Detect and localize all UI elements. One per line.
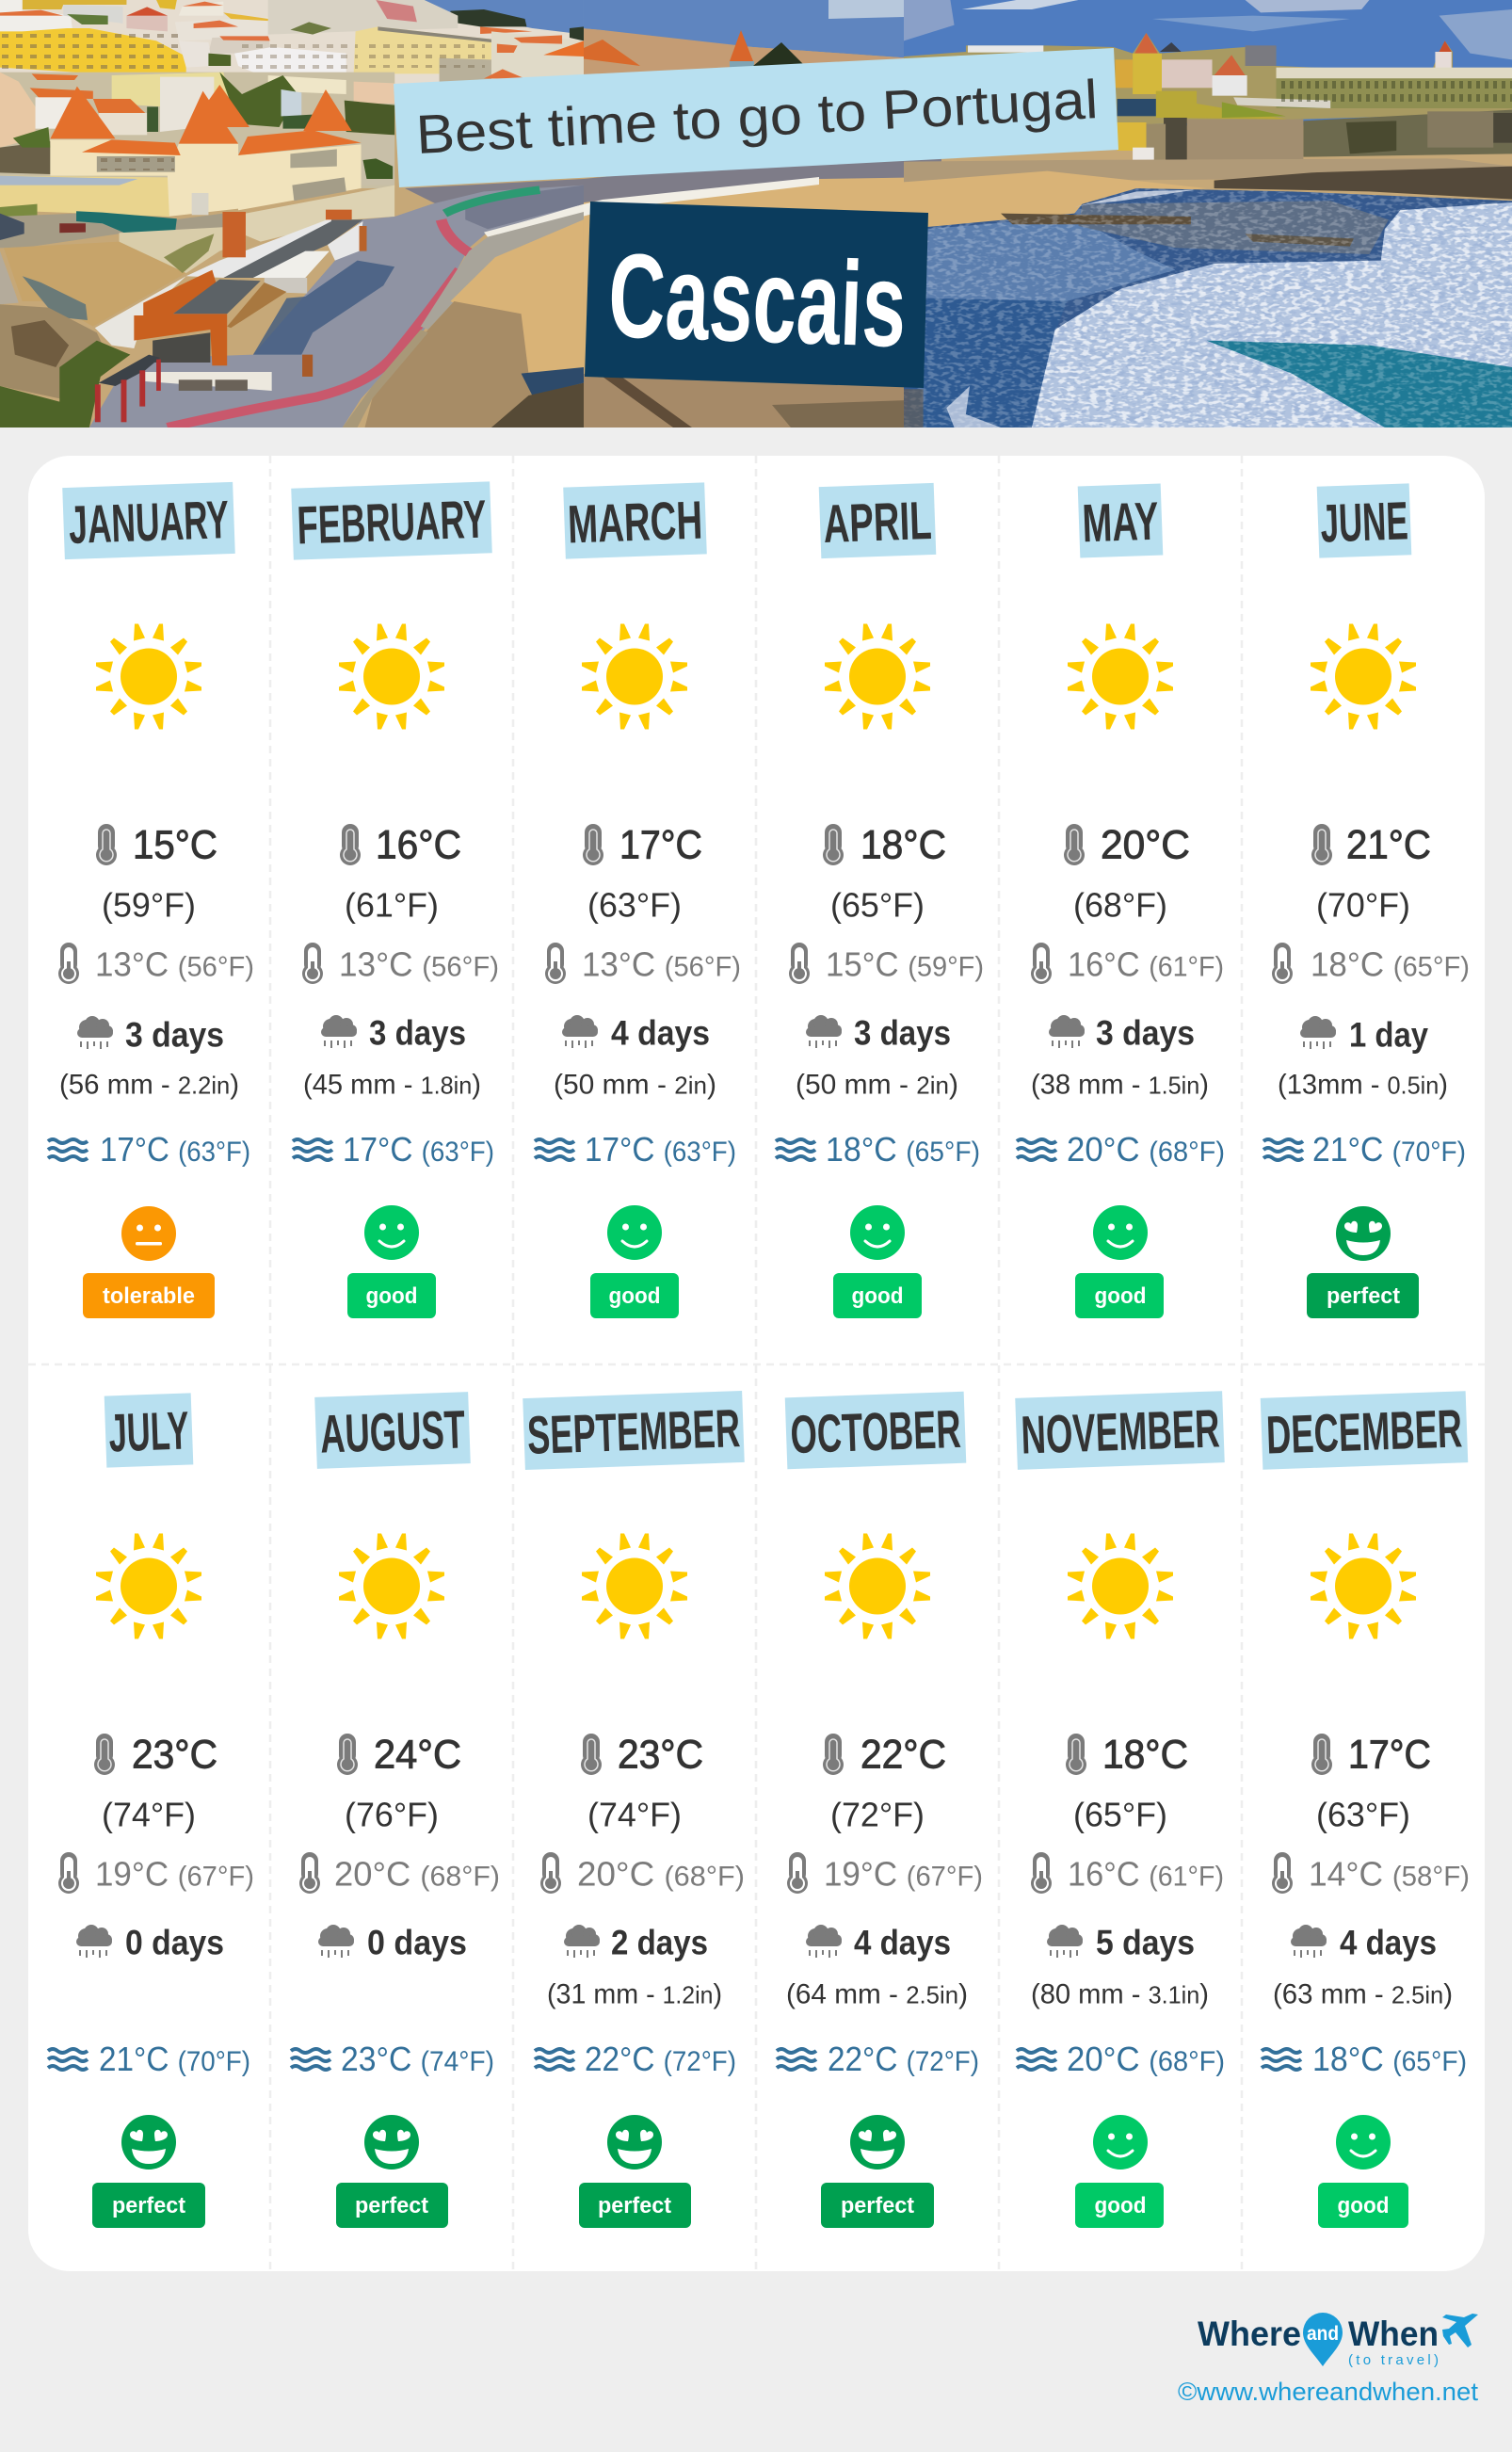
rating badge: good: good: [365, 1283, 418, 1309]
month column: August: [291, 1392, 500, 2228]
low temperature: 18°C (65°F): [1311, 945, 1470, 983]
icon: thermometer low: [1031, 943, 1052, 984]
rating badge: tolerable: tolerable: [103, 1283, 195, 1309]
icon: heart-eyes face: [850, 2115, 905, 2170]
icon: thermometer low: [1272, 1852, 1293, 1894]
high temperature: 18°C: [1102, 1733, 1188, 1778]
high temperature: 17°C: [619, 823, 702, 868]
icon: thermometer low: [789, 943, 810, 984]
icon: happy face: [364, 1205, 419, 1260]
rainy days: 4 days: [1340, 1923, 1437, 1962]
month column: July: [48, 1393, 254, 2228]
rating badge: good: good: [608, 1283, 661, 1309]
heading: April: [819, 483, 936, 558]
heading: October: [785, 1392, 966, 1469]
icon: thermometer high: [583, 824, 603, 865]
high temperature: 23°C: [132, 1733, 217, 1778]
icon: sun: [825, 623, 930, 729]
icon: rain cloud: [1300, 1016, 1336, 1049]
icon: heart-eyes face: [607, 2115, 662, 2170]
icon: thermometer high: [340, 824, 361, 865]
heading: May: MAY: [1081, 492, 1160, 554]
icon: thermometer low: [787, 1852, 808, 1894]
sea temperature: 22°C (72°F): [585, 2040, 736, 2078]
low temperature: 13°C (56°F): [582, 945, 741, 983]
heading: November: [1015, 1391, 1225, 1470]
icon: sun: [582, 623, 687, 729]
icon: thermometer high: [337, 1734, 358, 1775]
sea temperature: 17°C (63°F): [343, 1130, 494, 1169]
icon: rain cloud: [321, 1015, 357, 1048]
icon: thermometer high: [823, 1734, 844, 1775]
heading: February: FEBRUARY: [297, 490, 488, 556]
icon: sun: [1068, 1533, 1173, 1638]
sea temperature: 17°C (63°F): [585, 1130, 736, 1169]
hero photo: Cascais coastline: [0, 0, 1512, 427]
month column: April: [776, 483, 984, 1318]
icon: thermometer low: [302, 943, 323, 984]
rating badge: good: good: [1094, 2193, 1147, 2218]
icon: sun: [96, 1533, 201, 1638]
title banner: [394, 48, 1118, 187]
rainy days: 1 day: [1349, 1015, 1428, 1055]
high temperature fahrenheit: (61°F): [345, 885, 439, 925]
icon: waves: [48, 1139, 88, 1160]
sea temperature: 21°C (70°F): [99, 2040, 250, 2078]
heading: October: OCTOBER: [790, 1399, 962, 1465]
low temperature: 13°C (56°F): [339, 945, 499, 983]
icon: heart-eyes face: [364, 2115, 419, 2170]
icon: waves: [48, 2049, 88, 2070]
heading: January: [62, 482, 235, 559]
icon: sun: [339, 1533, 444, 1638]
heading: July: JULY: [107, 1401, 190, 1463]
heading: August: [314, 1392, 471, 1469]
icon: waves: [293, 1139, 332, 1160]
low temperature: 13°C (56°F): [95, 945, 254, 983]
icon: sun: [1311, 623, 1416, 729]
month column: May: [1017, 483, 1225, 1318]
rating badge: perfect: [336, 2183, 448, 2228]
rating badge: perfect: [92, 2183, 205, 2228]
icon: rain cloud: [76, 1925, 112, 1958]
icon: happy face: [607, 1205, 662, 1260]
high temperature: 16°C: [376, 823, 461, 868]
icon: sun: [1068, 623, 1173, 729]
website credit: ©www.whereandwhen.net: [1178, 2378, 1479, 2406]
icon: thermometer low: [540, 1852, 561, 1894]
panel: monthly climate table: [28, 456, 1485, 2271]
high temperature fahrenheit: (70°F): [1316, 885, 1410, 925]
low temperature: 20°C (68°F): [577, 1855, 745, 1893]
icon: thermometer high: [1311, 824, 1332, 865]
icon: happy face: [1336, 2115, 1391, 2170]
rating badge: good: good: [1094, 1283, 1147, 1309]
rainy days: 3 days: [369, 1013, 466, 1053]
sea temperature: 20°C (68°F): [1067, 1130, 1225, 1169]
high temperature fahrenheit: (74°F): [587, 1795, 682, 1834]
rating badge: perfect: perfect: [355, 2193, 428, 2218]
rainy days: 0 days: [125, 1923, 224, 1962]
rainy days: 3 days: [1096, 1013, 1195, 1053]
rating badge: good: [1075, 1273, 1164, 1318]
icon: waves: [776, 1139, 815, 1160]
icon: thermometer low: [1031, 1852, 1052, 1894]
icon: waves: [535, 2049, 574, 2070]
month column: October: [777, 1392, 983, 2228]
icon: waves: [1263, 1139, 1303, 1160]
rainfall amount: (45 mm - 1.8in): [303, 1070, 481, 1100]
rainfall amount: (56 mm - 2.2in): [59, 1070, 239, 1100]
rainy days: 5 days: [1096, 1923, 1195, 1962]
logo: Where and When: Where: [1198, 2315, 1301, 2353]
icon: rain cloud: [1291, 1925, 1327, 1958]
high temperature fahrenheit: (68°F): [1073, 885, 1167, 925]
icon: thermometer high: [1066, 1734, 1086, 1775]
rating badge: good: [590, 1273, 679, 1318]
rating badge: perfect: perfect: [112, 2193, 185, 2218]
month column: December: [1261, 1391, 1470, 2228]
icon: thermometer high: [94, 1734, 115, 1775]
month column: March: [535, 482, 741, 1318]
low temperature: 19°C (67°F): [95, 1855, 254, 1893]
city name: Cascais: Cascais: [606, 228, 909, 372]
sea temperature: 18°C (65°F): [1312, 2040, 1467, 2078]
rating badge: perfect: perfect: [841, 2193, 914, 2218]
rating badge: perfect: [821, 2183, 934, 2228]
rainfall amount: (13mm - 0.5in): [1278, 1070, 1448, 1100]
icon: rain cloud: [77, 1016, 113, 1049]
icon: map pin: and: [1307, 2323, 1339, 2345]
heading: June: JUNE: [1319, 491, 1409, 555]
high temperature fahrenheit: (76°F): [345, 1795, 439, 1834]
icon: map pin: [1303, 2313, 1343, 2366]
rating badge: good: [1075, 2183, 1164, 2228]
heading: March: [563, 482, 707, 559]
sea temperature: 18°C (65°F): [826, 1130, 980, 1169]
icon: sun: [582, 1533, 687, 1638]
icon: thermometer low: [58, 943, 79, 984]
low temperature: 14°C (58°F): [1309, 1855, 1470, 1893]
rainfall amount: (80 mm - 3.1in): [1031, 1979, 1209, 2009]
heading: September: SEPTEMBER: [526, 1398, 741, 1466]
heading: November: NOVEMBER: [1021, 1398, 1221, 1466]
heading: August: AUGUST: [319, 1399, 466, 1465]
month column: June: [1263, 483, 1470, 1318]
rainfall amount: (31 mm - 1.2in): [547, 1979, 722, 2009]
sea temperature: 17°C (63°F): [100, 1130, 250, 1169]
icon: sun: [1311, 1533, 1416, 1638]
low temperature: 20°C (68°F): [334, 1855, 500, 1893]
sea temperature: 20°C (68°F): [1067, 2040, 1225, 2078]
icon: sun: [96, 623, 201, 729]
icon: neutral face: [121, 1206, 176, 1261]
icon: airplane: [1442, 2314, 1478, 2347]
high temperature: 23°C: [618, 1733, 703, 1778]
icon: thermometer high: [1311, 1734, 1332, 1775]
title text: Best time to go to Portugal: [414, 69, 1100, 166]
low temperature: 15°C (59°F): [826, 945, 984, 983]
high temperature: 18°C: [861, 823, 946, 868]
rainy days: 4 days: [854, 1923, 951, 1962]
month column: November: [1015, 1391, 1225, 2228]
icon: happy face: [1093, 1205, 1148, 1260]
icon: waves: [535, 1139, 574, 1160]
high temperature: 24°C: [374, 1733, 461, 1778]
high temperature fahrenheit: (72°F): [830, 1795, 925, 1834]
high temperature fahrenheit: (65°F): [830, 885, 925, 925]
rating badge: perfect: perfect: [1327, 1283, 1400, 1309]
icon: rain cloud: [318, 1925, 354, 1958]
low temperature: 16°C (61°F): [1068, 945, 1224, 983]
icon: happy face: [1093, 2115, 1148, 2170]
icon: thermometer low: [1272, 943, 1293, 984]
icon: rain cloud: [806, 1015, 842, 1048]
logo: Where and When: (to travel): [1348, 2352, 1439, 2368]
icon: waves: [1017, 2049, 1056, 2070]
heading: September: [523, 1391, 745, 1470]
high temperature: 20°C: [1101, 823, 1190, 868]
heading: June: [1317, 483, 1411, 558]
high temperature: 15°C: [133, 823, 217, 868]
icon: rain cloud: [1047, 1925, 1083, 1958]
sea temperature: 21°C (70°F): [1312, 1130, 1466, 1169]
heading: March: MARCH: [567, 491, 703, 555]
icon: waves: [1017, 1139, 1056, 1160]
icon: rain cloud: [1049, 1015, 1085, 1048]
icon: heart-eyes face: [1336, 1206, 1391, 1261]
icon: thermometer high: [1064, 824, 1085, 865]
rainfall amount: (64 mm - 2.5in): [786, 1979, 968, 2009]
rating badge: perfect: [1307, 1273, 1419, 1318]
sea temperature: 22°C (72°F): [828, 2040, 979, 2078]
rainfall amount: (38 mm - 1.5in): [1031, 1070, 1209, 1100]
icon: rain cloud: [564, 1925, 600, 1958]
high temperature: 21°C: [1346, 823, 1431, 868]
icon: thermometer low: [58, 1852, 79, 1894]
sea temperature: 23°C (74°F): [341, 2040, 494, 2078]
month column: January: [48, 482, 254, 1318]
icon: sun: [825, 1533, 930, 1638]
rating badge: good: good: [1337, 2193, 1390, 2218]
icon: waves: [1262, 2049, 1301, 2070]
icon: happy face: [850, 1205, 905, 1260]
icon: thermometer high: [823, 824, 844, 865]
rating badge: tolerable: [83, 1273, 215, 1318]
icon: waves: [777, 2049, 816, 2070]
month column: February: [291, 481, 499, 1318]
high temperature: 22°C: [861, 1733, 946, 1778]
heading: May: [1078, 483, 1163, 558]
rating badge: good: good: [851, 1283, 904, 1309]
rainfall amount: (50 mm - 2in): [796, 1070, 958, 1100]
high temperature fahrenheit: (74°F): [102, 1795, 196, 1834]
icon: thermometer high: [96, 824, 117, 865]
rainy days: 2 days: [611, 1923, 708, 1962]
high temperature fahrenheit: (63°F): [1316, 1795, 1410, 1834]
icon: heart-eyes face: [121, 2115, 176, 2170]
icon: waves: [291, 2049, 330, 2070]
icon: thermometer low: [545, 943, 566, 984]
high temperature fahrenheit: (65°F): [1073, 1795, 1167, 1834]
low temperature: 19°C (67°F): [824, 1855, 983, 1893]
icon: sun: [339, 623, 444, 729]
rainy days: 4 days: [611, 1013, 710, 1053]
icon: rain cloud: [806, 1925, 842, 1958]
high temperature: 17°C: [1348, 1733, 1431, 1778]
rainy days: 3 days: [125, 1015, 224, 1055]
rating badge: good: [1318, 2183, 1408, 2228]
rating badge: good: [833, 1273, 922, 1318]
icon: rain cloud: [562, 1015, 598, 1048]
icon: thermometer high: [581, 1734, 602, 1775]
rating badge: good: [347, 1273, 436, 1318]
logo: Where and When: [1198, 2313, 1478, 2368]
heading: April: APRIL: [822, 491, 933, 555]
logo: Where and When: When: [1348, 2315, 1439, 2353]
month column: September: [523, 1391, 745, 2228]
rating badge: perfect: [579, 2183, 691, 2228]
heading: February: [291, 481, 492, 560]
high temperature fahrenheit: (59°F): [102, 885, 196, 925]
rainy days: 3 days: [854, 1013, 951, 1053]
heading: July: [105, 1393, 193, 1468]
city name banner: [585, 202, 928, 388]
high temperature fahrenheit: (63°F): [587, 885, 682, 925]
low temperature: 16°C (61°F): [1068, 1855, 1224, 1893]
rainfall amount: (63 mm - 2.5in): [1273, 1979, 1453, 2009]
rating badge: perfect: perfect: [598, 2193, 671, 2218]
icon: thermometer low: [299, 1852, 320, 1894]
rainy days: 0 days: [367, 1923, 467, 1962]
rainfall amount: (50 mm - 2in): [554, 1070, 716, 1100]
heading: January: JANUARY: [68, 490, 230, 556]
